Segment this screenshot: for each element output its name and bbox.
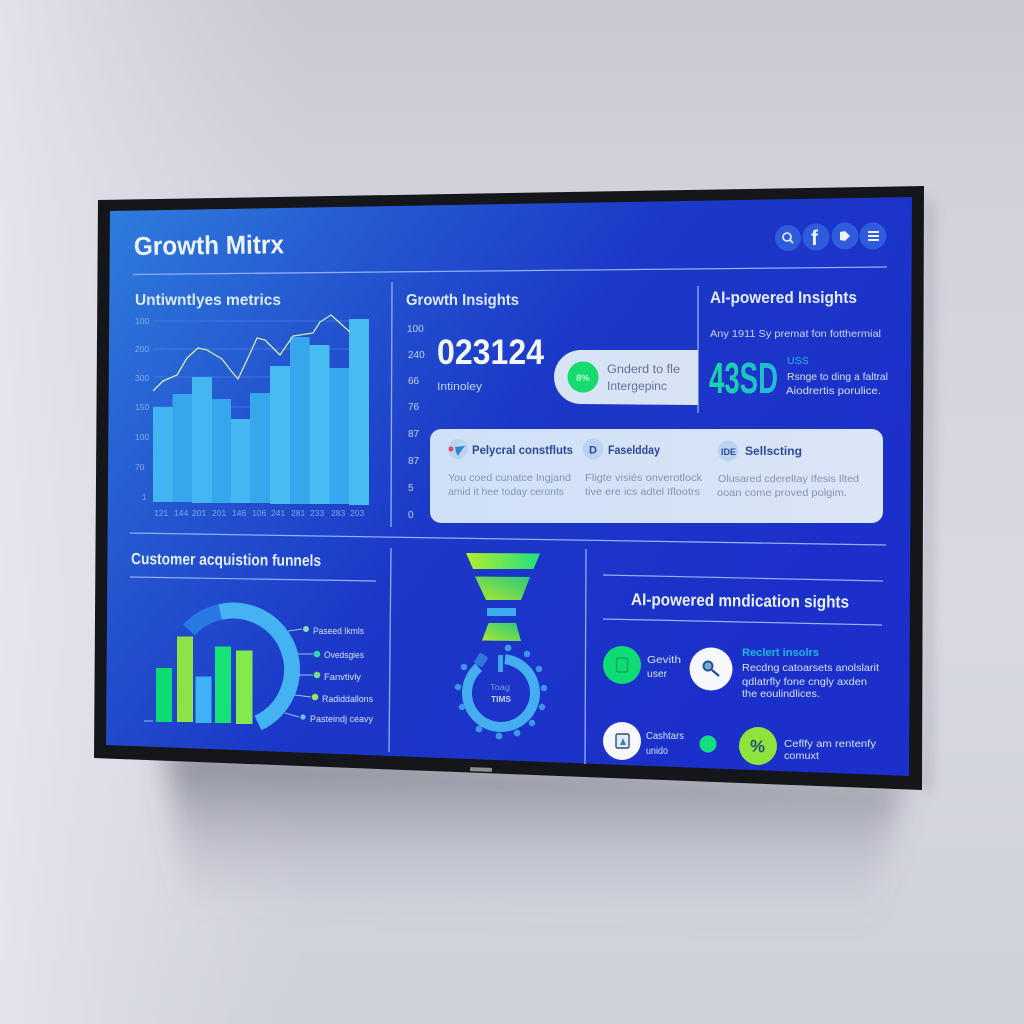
item: percent bbox=[739, 727, 877, 765]
header icons: f bbox=[811, 227, 819, 250]
item: recent insights: Recdng catoarsets anolslarit bbox=[742, 662, 879, 674]
axis labels: 203 bbox=[350, 508, 364, 518]
stat note: USS bbox=[787, 355, 809, 367]
axis labels: 201 bbox=[212, 508, 226, 518]
funnel bbox=[466, 553, 540, 641]
header icons bbox=[775, 222, 886, 251]
feature 1: You coed cunatce Ingjand bbox=[448, 472, 571, 484]
panel: AI indication insights bbox=[603, 575, 883, 765]
item: percent: comuxt bbox=[784, 750, 819, 762]
item: custom index bbox=[603, 722, 684, 760]
legend bbox=[285, 626, 373, 725]
callout pill: Gnderd to fle bbox=[607, 364, 680, 376]
donut arc bbox=[189, 611, 292, 723]
dashboard header bbox=[134, 222, 886, 261]
item: recent insights: the eoulindlices. bbox=[742, 688, 820, 700]
feature 2: tive ere ics adtel Iflootrs bbox=[585, 486, 700, 498]
panel: growth insights bbox=[406, 292, 698, 521]
callout pill: Intergepinc bbox=[607, 381, 667, 393]
axis numbers: 66 bbox=[408, 376, 420, 387]
television shadow bbox=[165, 200, 934, 925]
axis labels: 144 bbox=[174, 508, 188, 518]
axis numbers: 240 bbox=[408, 350, 425, 361]
feature 2: D bbox=[589, 444, 597, 456]
axis numbers: 100 bbox=[407, 324, 424, 335]
green dot bbox=[700, 736, 716, 752]
item: growth user: user bbox=[647, 668, 667, 680]
heading: AI-powered Insights bbox=[710, 288, 857, 307]
item: recent insights: qdlatrfly fone cngly axden bbox=[742, 676, 867, 688]
legend: Fanvtivly bbox=[324, 672, 361, 683]
axis labels: 233 bbox=[310, 508, 324, 518]
big stat: 43SD bbox=[709, 354, 778, 403]
item: growth user: Gevith bbox=[647, 654, 681, 666]
feature 2: Fligte visiés onverotlock bbox=[585, 472, 703, 484]
axis labels: 121 bbox=[154, 508, 168, 518]
gauge bbox=[455, 645, 547, 739]
axis numbers: 76 bbox=[408, 402, 420, 413]
item: recent insights bbox=[690, 647, 879, 700]
heading: Untiwntlyes metrics bbox=[135, 292, 281, 309]
gauge: TIMS bbox=[491, 694, 511, 704]
gauge: Toag bbox=[490, 683, 510, 692]
panel: metrics chart bbox=[135, 292, 369, 518]
caption: Intinoley bbox=[437, 381, 483, 393]
heading: Growth Insights bbox=[406, 292, 519, 309]
feature 3 bbox=[717, 440, 859, 499]
item: growth user bbox=[603, 646, 681, 684]
legend: Ovedsgies bbox=[324, 650, 364, 661]
axis labels: 100 bbox=[135, 316, 149, 326]
television frame bbox=[94, 186, 924, 790]
item: custom index: unido bbox=[646, 745, 668, 757]
panel: white features card bbox=[430, 429, 883, 523]
axis numbers: 5 bbox=[408, 483, 414, 494]
feature 2 bbox=[582, 438, 703, 498]
feature 3: Sellscting bbox=[745, 444, 802, 458]
item: percent: Ceflfy am rentenfy bbox=[784, 738, 877, 750]
feature 3: IDE bbox=[721, 447, 736, 457]
axis labels: 1 bbox=[142, 492, 147, 502]
feature 3: Olusared cdereltay Ifesis Ilted bbox=[718, 473, 859, 485]
item: custom index: Cashtars bbox=[646, 730, 684, 742]
feature 2: Faseldday bbox=[608, 443, 660, 457]
axis labels: 241 bbox=[271, 508, 285, 518]
heading: Customer acquistion funnels bbox=[131, 551, 321, 570]
legend: Radiddallons bbox=[322, 694, 373, 705]
axis labels: 70 bbox=[135, 462, 145, 472]
divider lines bbox=[130, 267, 887, 764]
legend: Pasteindj ceavy bbox=[310, 714, 373, 725]
axis numbers bbox=[407, 324, 425, 521]
axis labels: 283 bbox=[331, 508, 345, 518]
panel: customer acquisition bbox=[130, 551, 376, 725]
item: recent insights: Reclert insolrs bbox=[742, 647, 819, 659]
axis labels: 100 bbox=[135, 432, 149, 442]
heading: AI-powered mndication sights bbox=[631, 590, 849, 612]
axis labels bbox=[135, 316, 364, 518]
feature 1: amid it hee today ceronts bbox=[448, 486, 564, 498]
trend line bbox=[153, 315, 350, 391]
panel: funnel and gauge bbox=[455, 553, 547, 739]
axis numbers: 0 bbox=[408, 510, 414, 521]
axis labels: 146 bbox=[232, 508, 246, 518]
feature 1: Pelycral constfluts bbox=[472, 443, 573, 457]
axis labels: 200 bbox=[135, 344, 149, 354]
axis numbers: 87 bbox=[408, 429, 420, 440]
axis numbers: 87 bbox=[408, 456, 420, 467]
callout pill: 8% bbox=[576, 373, 590, 384]
panel: AI-powered insights bbox=[709, 288, 888, 403]
bar chart bbox=[153, 315, 369, 505]
feature 3: ooan come proved polgim. bbox=[717, 487, 847, 499]
stat note: Rsnge to ding a faltral bbox=[787, 371, 888, 383]
item: percent: % bbox=[749, 736, 766, 756]
axis labels: 201 bbox=[192, 508, 206, 518]
big number: 023124 bbox=[437, 333, 544, 372]
stat note: Aiodrertis porulice. bbox=[786, 385, 881, 397]
axis labels: 300 bbox=[135, 373, 149, 383]
legend: Paseed Ikmls bbox=[313, 626, 364, 637]
description: Any 1911 Sy premat fon fotthermial bbox=[710, 328, 881, 340]
feature 1 bbox=[448, 439, 573, 498]
axis labels: 106 bbox=[252, 508, 266, 518]
title: Growth Mitrx bbox=[134, 229, 285, 261]
axis labels: 150 bbox=[135, 402, 149, 412]
callout pill bbox=[554, 350, 698, 405]
axis labels: 281 bbox=[291, 508, 305, 518]
stat note bbox=[786, 355, 888, 397]
bars bbox=[144, 636, 252, 724]
